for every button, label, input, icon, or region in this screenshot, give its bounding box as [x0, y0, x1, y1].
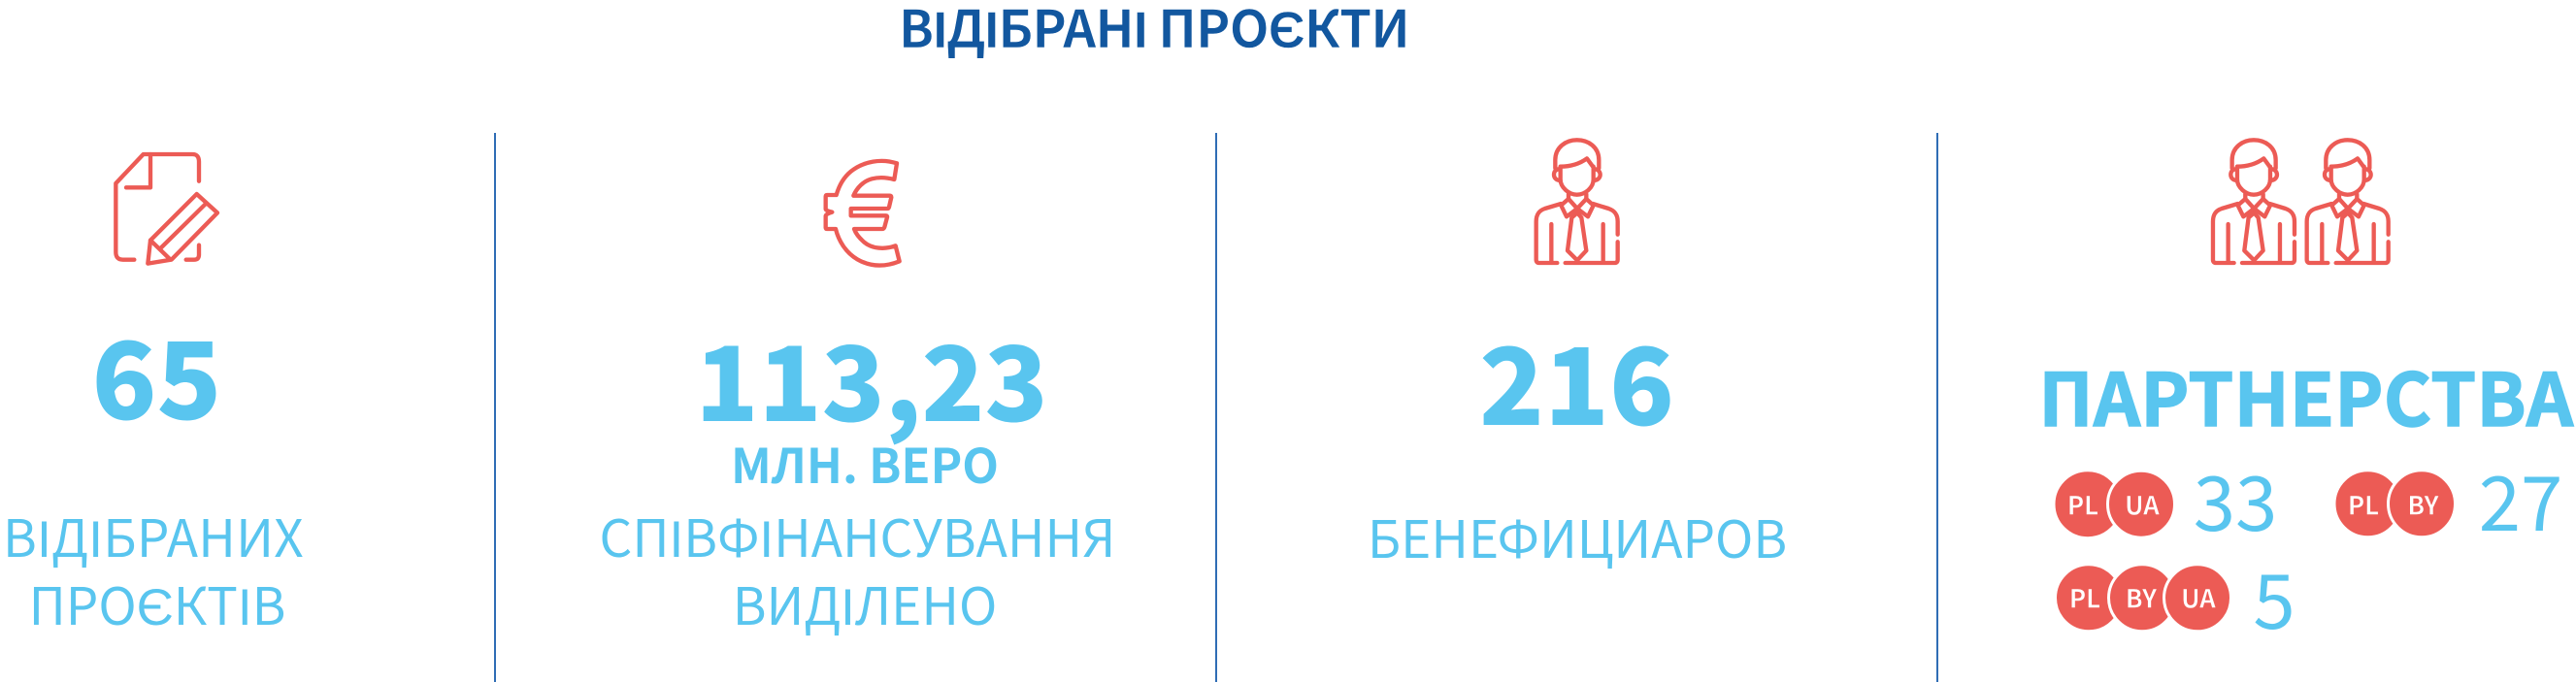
column divider 3 [1936, 133, 1938, 682]
unit: million euro: МЛН. ВЕРО [731, 429, 999, 498]
badges: PL BY [2334, 471, 2456, 537]
badges: PL BY: PL [2348, 487, 2379, 522]
count: 5: 5 [2253, 542, 2295, 651]
label: beneficiaries: БЕНЕФИЦИАРОВ [1368, 500, 1787, 573]
label: selected projects: ВІДІБРАНИХ [3, 499, 304, 572]
icon: document with pencil [116, 154, 217, 264]
badges: PL UA [2054, 471, 2174, 538]
number: 216: 216 [1479, 301, 1674, 456]
icon: person [1536, 140, 1618, 263]
badges: PL BY: BY [2407, 487, 2440, 522]
count: 33: 33 [2194, 444, 2277, 553]
icon: euro sign [826, 161, 900, 265]
badges: PL BY UA: BY [2126, 580, 2158, 616]
panel: co-financing [600, 161, 1116, 640]
count: 27: 27 [2479, 444, 2562, 553]
icon: two people [2213, 140, 2389, 263]
panel: selected projects: ПРОЄКТІВ [29, 567, 285, 640]
number: 65: 65 [92, 295, 221, 450]
label: co-financing allocated: СПІВФІНАНСУВАННЯ [600, 499, 1116, 572]
badges: PL UA: PL [2067, 487, 2098, 522]
number: 113,23: 113,23 [695, 301, 1048, 451]
panel: beneficiaries [1368, 140, 1787, 573]
panel: selected projects [3, 154, 304, 640]
panel: co-financing: ВИДІЛЕНО [733, 567, 997, 640]
column divider 1 [494, 133, 496, 682]
badges: PL UA: UA [2125, 487, 2160, 522]
column divider 2 [1215, 133, 1217, 682]
badges: PL BY UA: UA [2181, 580, 2216, 616]
badges: PL BY UA [2056, 565, 2230, 632]
heading: partnerships: ПАРТНЕРСТВА [2039, 341, 2574, 447]
badges: PL BY UA: PL [2069, 580, 2100, 616]
panel: partnerships [2039, 140, 2574, 651]
